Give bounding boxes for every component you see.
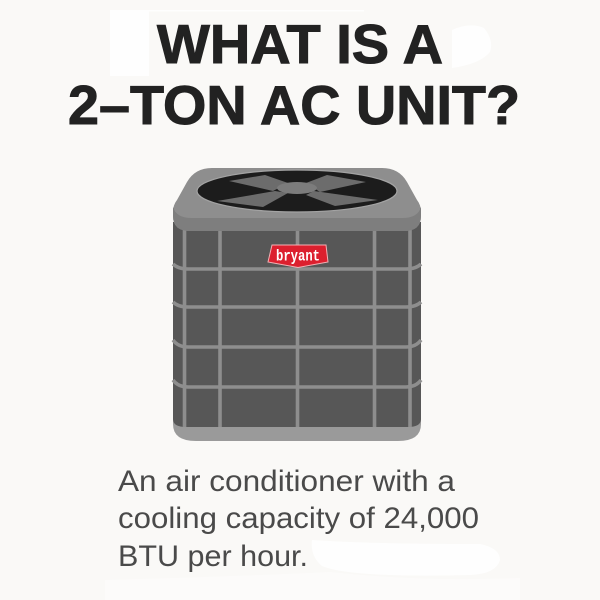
description text: An air conditioner with a: [118, 465, 456, 498]
unit body: [173, 222, 421, 427]
description text: [118, 465, 479, 573]
description text: cooling capacity of 24,000: [118, 502, 479, 535]
cover front band: [173, 207, 421, 231]
title: WHAT IS A: [157, 13, 443, 75]
fan blades: [217, 175, 378, 207]
logo: bryant: bryant: [276, 248, 320, 266]
fan hub: [277, 182, 317, 194]
air conditioner unit illustration: [173, 168, 421, 441]
title: 2–TON AC UNIT?: [68, 74, 520, 136]
top cover: [173, 168, 421, 231]
unit base: [173, 419, 421, 441]
fan opening: [197, 170, 397, 212]
title: [68, 13, 520, 136]
logo: bryant: [268, 245, 328, 268]
description text: BTU per hour.: [118, 540, 308, 573]
coil guard grid: [173, 228, 421, 427]
